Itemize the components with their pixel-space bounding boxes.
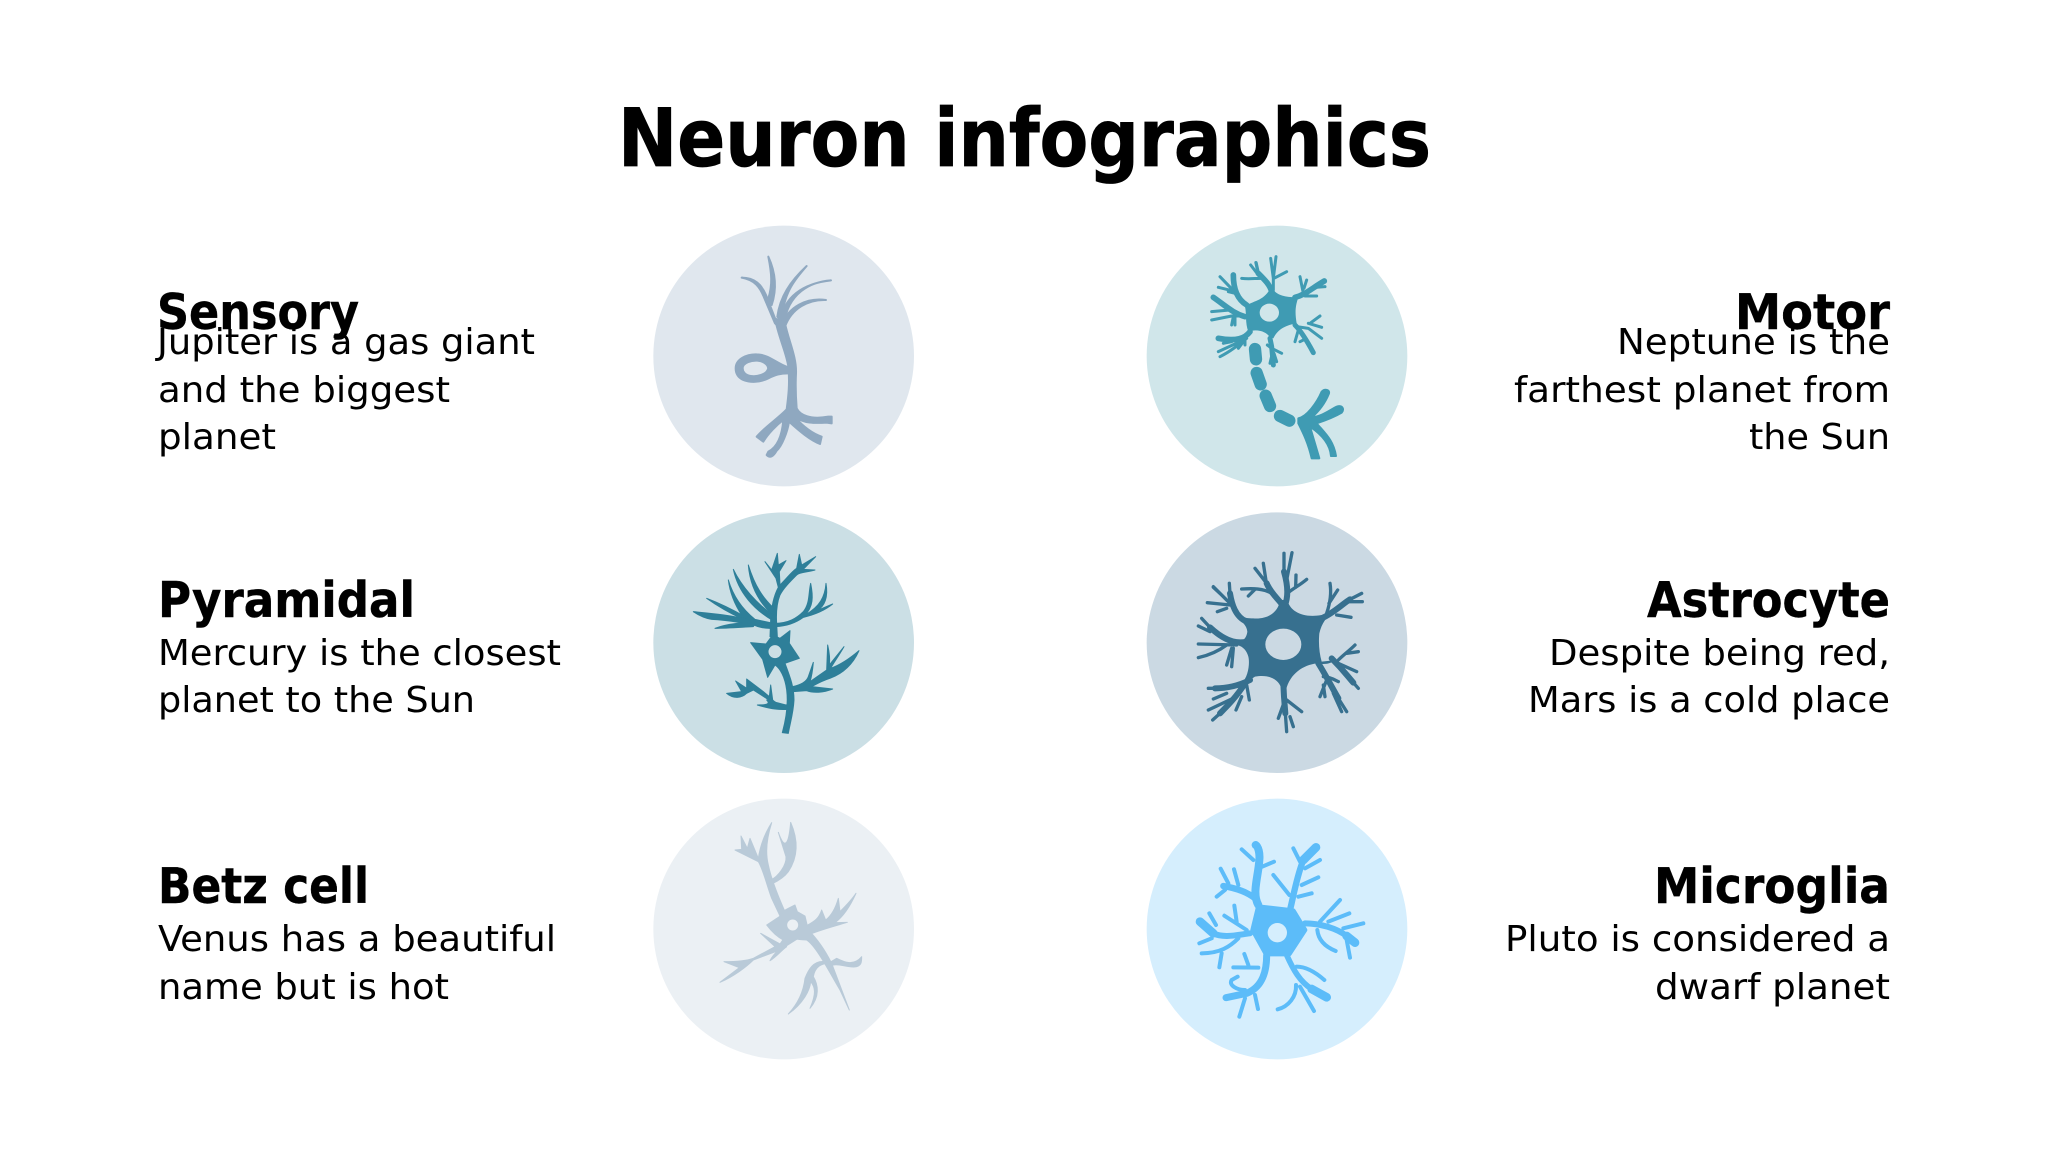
text block: Motor description: the Sun	[1749, 417, 1890, 458]
icon: sensory neuron	[653, 226, 914, 486]
icon: Betz cell neuron	[653, 799, 914, 1059]
heading: Pyramidal: Pyramidal	[158, 572, 415, 629]
icon: motor neuron	[1147, 226, 1407, 486]
text block: Betz cell description: name but is hot	[158, 967, 449, 1008]
text block: Motor description	[1514, 322, 1890, 458]
text block: Astrocyte description	[1528, 633, 1890, 721]
panel: Sensory text	[155, 284, 535, 458]
text block: Pyramidal description: planet to the Sun	[158, 680, 475, 721]
text block: Motor description: Neptune is the	[1617, 322, 1890, 363]
text block: Pyramidal description	[158, 633, 561, 721]
title: Neuron infographics	[618, 92, 1431, 185]
text block: Pyramidal description: Mercury is the closest	[158, 633, 561, 674]
icon: microglia	[1147, 799, 1407, 1059]
text block: Microglia description	[1505, 919, 1890, 1008]
icon: pyramidal neuron	[653, 512, 914, 773]
icon: astrocyte	[1147, 512, 1407, 773]
heading: Sensory: Sensory	[157, 284, 359, 341]
panel: Betz cell text	[158, 858, 556, 1008]
panel: Motor text	[1514, 284, 1890, 458]
text block: Sensory description: planet	[158, 417, 276, 458]
text block: Motor description: farthest planet from	[1514, 370, 1890, 411]
text block: Betz cell description: Venus has a beautiful	[158, 919, 556, 960]
heading: Microglia: Microglia	[1654, 858, 1890, 915]
text block: Astrocyte description: Mars is a cold place	[1528, 680, 1890, 721]
text block: Sensory description: and the biggest	[158, 370, 450, 411]
text block: Astrocyte description: Despite being red,	[1549, 633, 1890, 674]
panel: Astrocyte text	[1528, 572, 1890, 721]
text block: Sensory description: Jupiter is a gas giant	[155, 322, 535, 363]
heading: Betz cell: Betz cell	[158, 858, 369, 915]
text block: Sensory description	[155, 322, 535, 458]
heading: Motor: Motor	[1735, 284, 1890, 341]
text block: Microglia description: Pluto is considered a	[1505, 919, 1890, 960]
panel: Pyramidal text	[158, 572, 561, 721]
heading: Astrocyte: Astrocyte	[1647, 572, 1890, 629]
text block: Betz cell description	[158, 919, 556, 1008]
text block: Microglia description: dwarf planet	[1655, 967, 1890, 1008]
panel: Microglia text	[1505, 858, 1890, 1008]
